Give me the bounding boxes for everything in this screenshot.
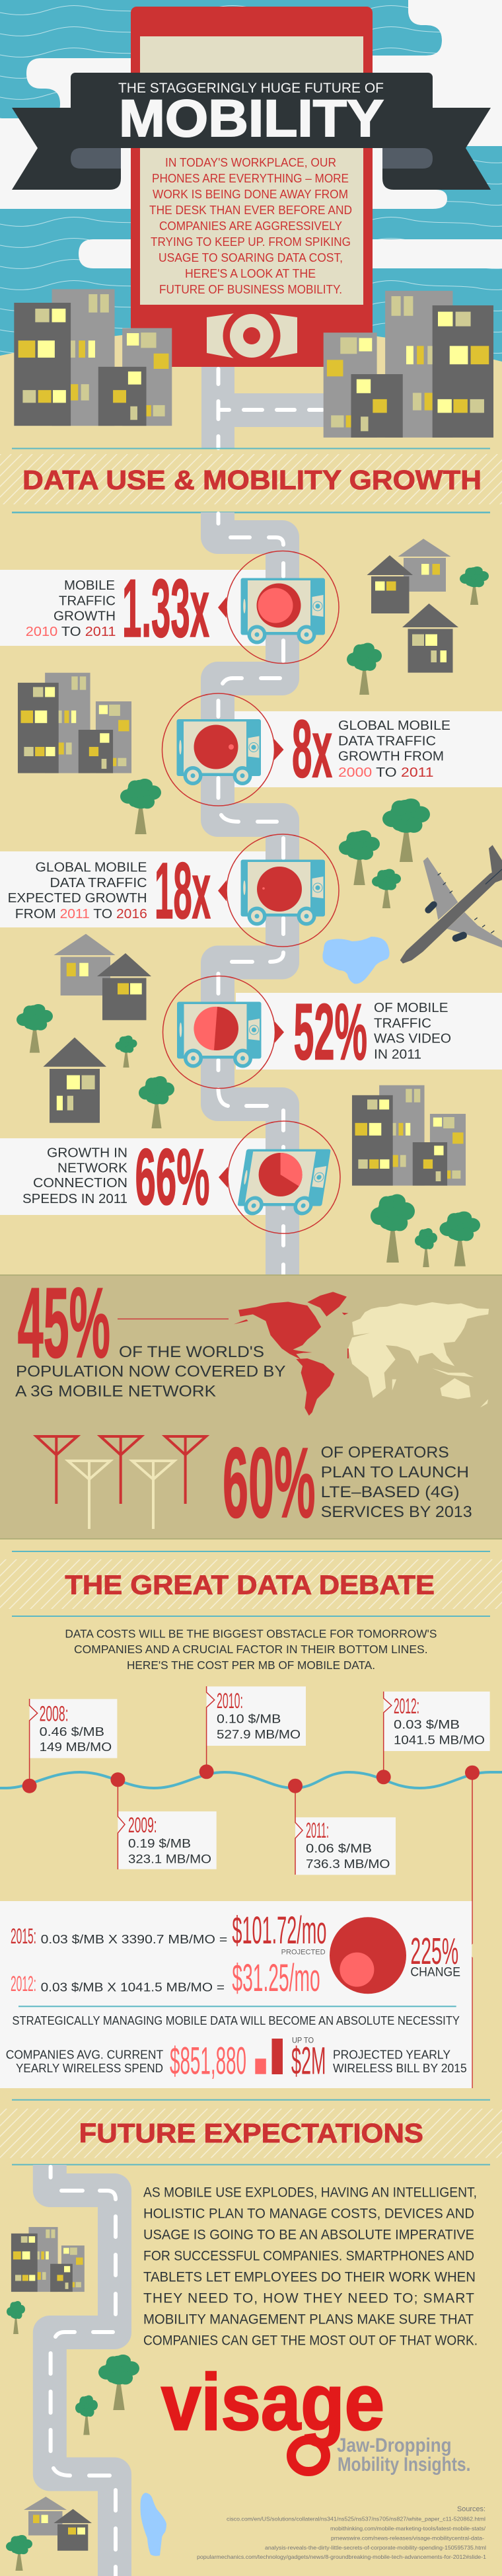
coverage text: OF THE WORLD'S — [119, 1343, 264, 1361]
intro text block — [149, 155, 352, 296]
stat 5: network connection speeds: 66% — [135, 1132, 210, 1222]
intro text block: PHONES ARE EVERYTHING – MORE — [152, 171, 349, 185]
sources: mobithinking.com/mobile-marketing-tools/latest-mobile-stats/ — [330, 2525, 486, 2532]
intro paragraph — [65, 1627, 437, 1672]
panel: projected cost — [0, 1901, 472, 2088]
2012 cost calculation — [11, 1957, 320, 2000]
intro paragraph: DATA COSTS WILL BE THE BIGGEST OBSTACLE FOR TOMORROW'S — [65, 1627, 437, 1640]
icon: arrow left — [218, 597, 227, 618]
visage logo: visage — [161, 2357, 384, 2447]
houses: bottom left — [24, 2497, 92, 2551]
phone — [131, 7, 373, 367]
cost panel backdrop lines and boxes — [30, 1686, 490, 1875]
stat label — [22, 1146, 127, 1206]
stat label: GLOBAL MOBILE — [338, 718, 450, 733]
stat 5: network connection speeds — [22, 1121, 340, 1233]
timeline entry 2011 — [306, 1818, 390, 1871]
world map — [234, 1292, 489, 1416]
timeline entry 2010: 527.9 MB/MO — [217, 1727, 301, 1741]
timeline entry 2009 — [128, 1813, 211, 1865]
hatched heading band — [0, 454, 502, 504]
panel: projected cost: $101.72/mo — [232, 1909, 326, 1952]
timeline dots — [22, 1764, 480, 1793]
road: header intersection — [201, 367, 327, 448]
sources: popularmechanics.com/technology/gadgets/news/8-groundbreaking-mobile-tech-advancements-for-2012#slide-1 — [197, 2554, 486, 2560]
intro text block: FUTURE OF BUSINESS MOBILITY. — [159, 282, 342, 296]
title: mobility: MOBILITY — [119, 89, 384, 147]
operators text: PLAN TO LAUNCH — [321, 1464, 469, 1481]
stat label — [374, 1000, 451, 1062]
operators text: SERVICES BY 2013 — [321, 1503, 472, 1521]
timeline entry 2012 — [394, 1694, 485, 1746]
stat label: EXPECTED GROWTH — [8, 890, 147, 906]
stat label: TRAFFIC — [374, 1015, 431, 1031]
stat 1: mobile traffic growth — [26, 551, 339, 664]
stat label: NETWORK — [57, 1160, 127, 1175]
stat label: SPEEDS IN 2011 — [22, 1191, 127, 1206]
title banner — [12, 73, 491, 190]
closing paragraph — [143, 2185, 478, 2349]
icon: arrow left — [218, 880, 227, 902]
stat 3: expected growth — [8, 834, 339, 947]
stat 4: video traffic: 52% — [293, 986, 367, 1076]
timeline connector lines — [30, 1686, 472, 2088]
icon: phone car with pie — [177, 719, 261, 785]
timeline entry 2008 — [40, 1701, 112, 1754]
closing paragraph: COMPANIES CAN GET THE MOST OUT OF THAT WORK. — [143, 2333, 478, 2349]
stat label: GROWTH — [54, 608, 116, 624]
stat label: WAS VIDEO — [374, 1031, 451, 1046]
road: future section — [50, 2165, 116, 2576]
timeline entry 2009: 2009: — [128, 1813, 157, 1837]
stat label: CONNECTION — [33, 1175, 127, 1190]
sources: Sources: — [457, 2505, 485, 2513]
timeline entry 2009: 323.1 MB/MO — [128, 1852, 211, 1865]
pond — [140, 2493, 166, 2556]
title: the staggeringly huge future of: THE STAGGERINGLY HUGE FUTURE OF — [118, 79, 384, 96]
stat label: 2000 TO 2011 — [338, 765, 433, 780]
header sky with waves and clouds — [0, 0, 502, 377]
stat label: FROM 2011 TO 2016 — [15, 906, 147, 921]
timeline entry 2011: 2011: — [306, 1818, 329, 1842]
trees: future section — [6, 2301, 139, 2571]
stat label — [26, 578, 116, 639]
timeline entry 2010: 0.10 $/MB — [217, 1712, 281, 1726]
stat 4: video traffic — [162, 976, 451, 1088]
header ground — [0, 327, 502, 456]
sources: prnewswire.com/news-releases/visage-mobilitycentral-data- — [331, 2534, 484, 2541]
2012 cost calculation: 2012: — [11, 1972, 36, 1996]
heading: the great data debate: THE GREAT DATA DEBATE — [65, 1570, 435, 1600]
tagline: Mobility Insights. — [338, 2454, 470, 2476]
houses: middle left cluster — [43, 934, 151, 1123]
tagline — [337, 2435, 470, 2476]
stat 1: mobile traffic growth: 1.33x — [122, 563, 209, 654]
stat label: TRAFFIC — [59, 594, 116, 608]
intro text block: IN TODAY'S WORKPLACE, OUR — [165, 155, 336, 169]
sources — [197, 2505, 486, 2560]
closing paragraph: HOLISTIC PLAN TO MANAGE COSTS, DEVICES AND — [143, 2206, 474, 2222]
stat label: GROWTH FROM — [338, 748, 444, 764]
current yearly spend: YEARLY WIRELESS SPEND — [16, 2061, 163, 2075]
timeline entry 2008: 149 MB/MO — [40, 1740, 112, 1754]
panel: global coverage: 45% — [18, 1267, 110, 1378]
225 percent change — [410, 1930, 460, 1979]
stat label — [338, 718, 450, 780]
timeline entry 2008: 0.46 $/MB — [40, 1725, 104, 1738]
projected yearly bill: UP TO — [292, 2037, 314, 2045]
coverage text: A 3G MOBILE NETWORK — [15, 1383, 216, 1401]
timeline entry 2008: 2008: — [40, 1701, 69, 1725]
city: header left — [14, 289, 172, 426]
sources: cisco.com/en/US/solutions/collateral/ns341/ns525/ns537/ns705/ns827/white_paper_c11-520862.html — [227, 2515, 485, 2522]
stat label: OF MOBILE — [374, 1000, 448, 1015]
closing paragraph: AS MOBILE USE EXPLODES, HAVING AN INTELLIGENT, — [143, 2185, 477, 2201]
houses: upper right cluster — [367, 539, 458, 673]
operators text: OF OPERATORS — [321, 1444, 449, 1462]
stat label: 2010 TO 2011 — [26, 624, 116, 639]
icon: phone car with pie — [240, 578, 325, 644]
heading: future expectations: FUTURE EXPECTATIONS — [79, 2118, 423, 2148]
tagline: Jaw-Dropping — [337, 2435, 452, 2456]
intro text block: HERE'S A LOOK AT THE — [185, 266, 316, 280]
city: lower right — [352, 1085, 466, 1186]
projected yearly bill: WIRELESS BILL BY 2015 — [333, 2061, 467, 2075]
coverage text — [15, 1343, 285, 1401]
chart: proportional circles — [330, 1917, 406, 1994]
timeline entry 2012: 2012: — [394, 1694, 419, 1718]
statement: STRATEGICALLY MANAGING MOBILE DATA WILL BECOME AN ABSOLUTE NECESSITY — [12, 2013, 460, 2027]
city: future section — [11, 2227, 85, 2292]
airplane — [400, 845, 502, 964]
city: header right — [324, 291, 493, 438]
visage logo — [161, 2357, 470, 2476]
intro text block: COMPANIES ARE AGGRESSIVELY — [159, 219, 342, 233]
icon: phone car with pie — [240, 859, 325, 925]
stat label: GROWTH IN — [47, 1146, 127, 1161]
panel: projected cost: $31.25/mo — [232, 1957, 320, 2000]
icon: phone home button — [207, 307, 297, 365]
2015 cost calculation: 0.03 $/MB X 3390.7 MB/MO = — [41, 1932, 227, 1946]
stat label: GLOBAL MOBILE — [36, 860, 147, 875]
timeline entry 2011: 0.06 $/MB — [306, 1842, 372, 1855]
bar chart: spend comparison — [255, 2039, 283, 2074]
2015 cost calculation: PROJECTED — [281, 1949, 326, 1957]
stat label: MOBILE — [64, 578, 115, 593]
projected yearly bill: $2M — [291, 2040, 326, 2083]
timeline entry 2012: 1041.5 MB/MO — [394, 1733, 485, 1746]
stat 2: global mobile data traffic growth: 8x — [292, 705, 332, 795]
intro text block: THE DESK THAN EVER BEFORE AND — [149, 203, 352, 217]
projected yearly bill — [291, 2037, 467, 2083]
stat label: DATA TRAFFIC — [50, 875, 147, 890]
stat bars — [0, 570, 502, 1215]
stat 2: global mobile data traffic growth — [162, 693, 450, 806]
stat label: IN 2011 — [374, 1046, 421, 1062]
timeline entry 2012: 0.03 $/MB — [394, 1717, 460, 1731]
road: winding main road — [218, 512, 283, 1275]
icon: phone car with 52 percent pie — [177, 1002, 262, 1068]
icon: arrow right — [275, 1022, 284, 1043]
icon: arrow right — [274, 739, 284, 760]
icon: arrow left — [219, 1167, 228, 1188]
timeline entry 2011: 736.3 MB/MO — [306, 1857, 390, 1871]
closing paragraph: USAGE IS GOING TO BE AN ABSOLUTE IMPERATIVE — [143, 2228, 474, 2243]
closing paragraph: MOBILITY MANAGEMENT PLANS MAKE SURE THAT — [143, 2312, 474, 2327]
2015 cost calculation: 2015: — [11, 1924, 36, 1948]
panel: global coverage: 60% — [223, 1426, 316, 1538]
225 percent change: CHANGE — [410, 1965, 460, 1979]
operators text — [321, 1444, 472, 1521]
panel: projected cost: $851,880 — [170, 2040, 246, 2083]
intro paragraph: HERE'S THE COST PER MB OF MOBILE DATA. — [127, 1659, 375, 1672]
timeline entry 2009: 0.19 $/MB — [128, 1836, 191, 1850]
icon: tilted phone car with 66 percent pie — [236, 1149, 331, 1215]
stat 3: expected growth: 18x — [155, 845, 211, 935]
intro text block: WORK IS BEING DONE AWAY FROM — [153, 187, 348, 201]
panel: global coverage — [0, 1267, 502, 1540]
intro paragraph: COMPANIES AND A CRUCIAL FACTOR IN THEIR BOTTOM LINES. — [74, 1643, 428, 1656]
city: left of road — [18, 673, 131, 773]
heading: data use and mobility growth: DATA USE & MOBILITY GROWTH — [22, 465, 482, 495]
operators text: LTE–BASED (4G) — [321, 1483, 460, 1501]
2015 cost calculation — [11, 1909, 326, 1957]
hatched heading band — [0, 2109, 502, 2158]
stat label: DATA TRAFFIC — [338, 734, 436, 748]
current yearly spend — [6, 2040, 246, 2083]
intro text block: USAGE TO SOARING DATA COST, — [159, 251, 343, 264]
2012 cost calculation: 0.03 $/MB X 1041.5 MB/MO = — [41, 1980, 225, 1994]
stat label — [8, 860, 147, 921]
timeline entry 2010: 2010: — [217, 1689, 243, 1713]
closing paragraph: THEY NEED TO, HOW THEY NEED TO; SMART — [143, 2291, 474, 2306]
sources: analysis-reveals-the-dirty-little-secrets-of-corporate-mobility-spending-150595735.html — [265, 2544, 486, 2551]
coverage text: POPULATION NOW COVERED BY — [16, 1363, 285, 1381]
hatched heading band — [0, 1559, 502, 1609]
timeline entry 2010 — [217, 1689, 301, 1741]
closing paragraph: FOR SUCCESSFUL COMPANIES. SMARTPHONES AND — [143, 2249, 474, 2264]
icon: antennas — [36, 1436, 206, 1529]
closing paragraph: TABLETS LET EMPLOYEES DO THEIR WORK WHEN — [143, 2270, 476, 2285]
intro text block: TRYING TO KEEP UP. FROM SPIKING — [151, 235, 351, 249]
pond — [322, 937, 390, 984]
timeline — [0, 1686, 502, 2088]
current yearly spend: COMPANIES AVG. CURRENT — [6, 2047, 163, 2061]
trees: data use section — [17, 566, 489, 1267]
projected yearly bill: PROJECTED YEARLY — [333, 2047, 450, 2061]
